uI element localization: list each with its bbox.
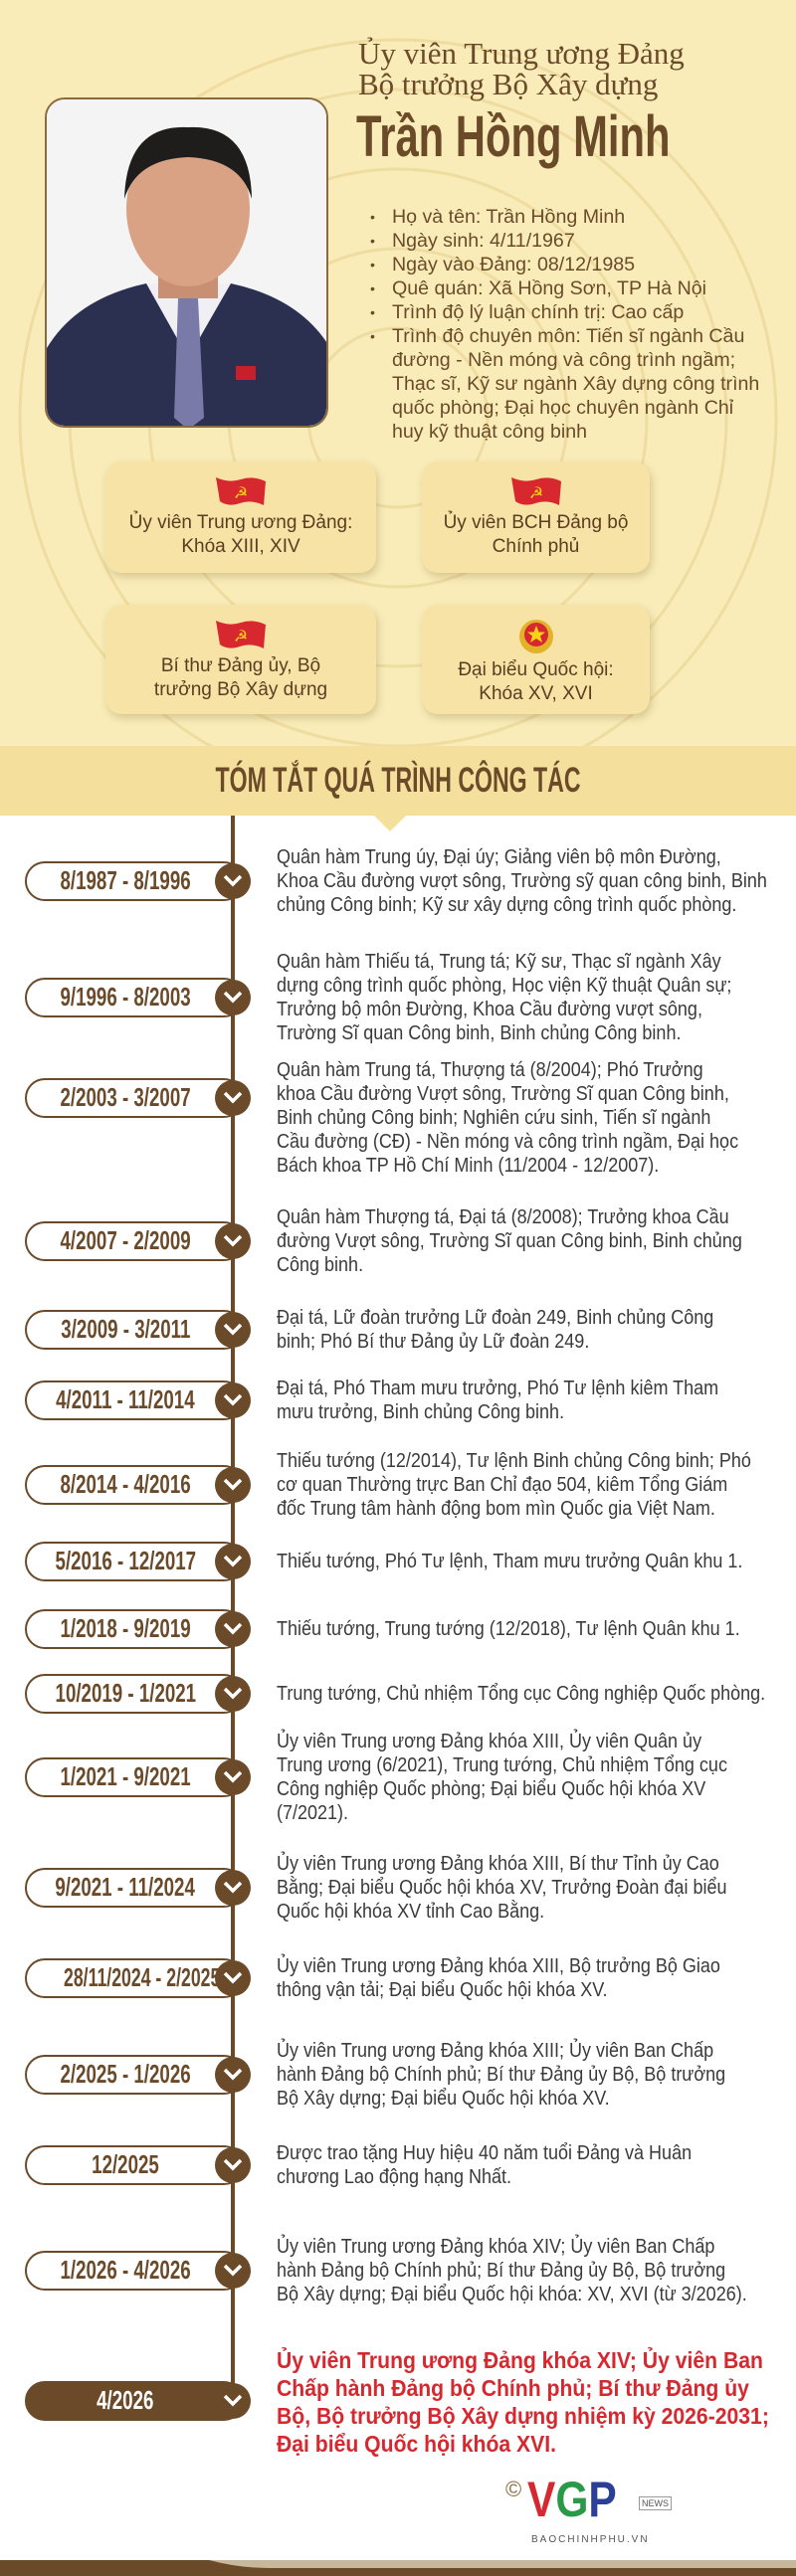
entry 5: binh; Phó Bí thư Đảng ủy Lữ đoàn 249. [277, 1331, 589, 1353]
entry 2: 9/1996 - 8/2003 [60, 982, 191, 1012]
entry 15: chương Lao động hạng Nhất. [277, 2166, 511, 2188]
entry 2: dựng công trình quốc phòng, Học viện Kỹ thuật Quân sự; [277, 975, 731, 997]
icon: party flag [511, 477, 561, 505]
entry 11: (7/2021). [277, 1802, 348, 1824]
entry 7 [25, 1450, 751, 1520]
card: central committee: Ủy viên Trung ương Đảng: [129, 512, 352, 533]
card: government party committee: Chính phủ [493, 536, 579, 557]
bio bullet list: Trình độ lý luận chính trị: Cao cấp [392, 301, 684, 323]
entry 2: Trường Sĩ quan Công binh, Binh chủng Công binh. [277, 1022, 681, 1044]
entry 5 [25, 1307, 713, 1353]
bio bullet list: Ngày sinh: 4/11/1967 [392, 230, 575, 252]
entry 7: Thiếu tướng (12/2014), Tư lệnh Binh chủng Công binh; Phó [277, 1450, 751, 1472]
entry 4: Quân hàm Thượng tá, Đại tá (8/2008); Trưởng khoa Cầu [277, 1206, 729, 1228]
entry 13: 28/11/2024 - 2/2025 [64, 1962, 220, 1992]
card: government party committee [422, 461, 650, 573]
entry 1: 8/1987 - 8/1996 [60, 865, 191, 895]
entry 2: Trưởng bộ môn Đường, Khoa Cầu đường vượt sông, [277, 999, 702, 1020]
entry 17: current: 4/2026 [97, 2385, 154, 2415]
entry 4: 4/2007 - 2/2009 [60, 1225, 191, 1255]
entry 11: Trung ương (6/2021), Trung tướng, Chủ nhiệm Tổng cục [277, 1754, 727, 1776]
entry 17: current: Đại biểu Quốc hội khóa XVI. [277, 2431, 556, 2457]
timeline vertical line [231, 816, 235, 2402]
entry 11 [25, 1729, 727, 1824]
icon: national emblem [519, 620, 553, 653]
logo: VGP: NEWS [642, 2498, 669, 2508]
entry 17: current [25, 2347, 769, 2457]
entry 3: Binh chủng Công binh; Nghiên cứu sinh, Tiến sĩ ngành [277, 1107, 710, 1129]
title: position: Ủy viên Trung ương Đảng [358, 36, 685, 71]
entry 1: Khoa Cầu đường vượt sông, Trường sỹ quan công binh, Binh [277, 870, 767, 892]
bio bullet list: đường - Nền móng và công trình ngầm; [392, 349, 735, 371]
entry 17: current: Ủy viên Trung ương Đảng khóa XIV; Ủy viên Ban [277, 2347, 763, 2373]
entry 16: hành Đảng bộ Chính phủ; Bí thư Đảng ủy Bộ, Bộ trưởng [277, 2260, 725, 2282]
card: party secretary minister [105, 605, 376, 714]
entry 12: Bằng; Đại biểu Quốc hội khóa XV, Trưởng Đoàn đại biểu [277, 1877, 726, 1899]
band pointer [374, 816, 406, 831]
section heading band [0, 746, 796, 816]
entry 6: 4/2011 - 11/2014 [56, 1384, 195, 1414]
entry 8: Thiếu tướng, Phó Tư lệnh, Tham mưu trưởng Quân khu 1. [277, 1551, 742, 1572]
entry 14: 2/2025 - 1/2026 [60, 2059, 191, 2089]
entry 5: Đại tá, Lữ đoàn trưởng Lữ đoàn 249, Binh chủng Công [277, 1307, 713, 1329]
entry 10 [25, 1674, 765, 1714]
icon: party flag [216, 477, 266, 505]
entry 15: 12/2025 [92, 2149, 159, 2179]
entry 16 [25, 2234, 747, 2305]
entry 4: đường Vượt sông, Trường Sĩ quan Công binh, Binh chủng [277, 1230, 742, 1252]
entry 9 [25, 1609, 740, 1649]
entry 2: Quân hàm Thiếu tá, Trung tá; Kỹ sư, Thạc sĩ ngành Xây [277, 951, 721, 973]
entry 3 [25, 1059, 738, 1177]
entry 3: Quân hàm Trung tá, Thượng tá (8/2004); Phó Trưởng [277, 1059, 703, 1081]
entry 3: Cầu đường (CĐ) - Nền móng và công trình ngầm, Đại học [277, 1131, 738, 1153]
entry 10: Trung tướng, Chủ nhiệm Tổng cục Công nghiệp Quốc phòng. [277, 1683, 765, 1705]
card: party secretary minister: Bí thư Đảng ủy, Bộ [161, 655, 320, 676]
header background [0, 0, 796, 746]
footer bar [0, 2560, 796, 2576]
entry 4: Công binh. [277, 1254, 363, 1276]
entry 6: Đại tá, Phó Tham mưu trưởng, Phó Tư lệnh kiêm Tham [277, 1378, 718, 1399]
entry 16: Ủy viên Trung ương Đảng khóa XIV; Ủy viên Ban Chấp [277, 2236, 714, 2258]
entry 10: 10/2019 - 1/2021 [55, 1678, 196, 1708]
logo: VGP: © [505, 2477, 521, 2501]
bio bullet list: Trình độ chuyên môn: Tiến sĩ ngành Cầu [392, 325, 744, 347]
logo: VGP: BAOCHINHPHU.VN [531, 2534, 650, 2545]
entry 6: mưu trưởng, Binh chủng Công binh. [277, 1401, 564, 1423]
entry 17: current: Chấp hành Đảng bộ Chính phủ; Bí thư Đảng ủy [277, 2375, 749, 2401]
section heading band: TÓM TẮT QUÁ TRÌNH CÔNG TÁC [215, 761, 581, 800]
entry 7: 8/2014 - 4/2016 [60, 1469, 191, 1499]
entry 8 [25, 1542, 742, 1581]
entry 3: khoa Cầu đường Vượt sông, Trường Sĩ quan Công binh, [277, 1083, 729, 1105]
entry 14: Bộ Xây dựng; Đại biểu Quốc hội khóa XV. [277, 2088, 610, 2110]
entry 7: cơ quan Thường trực Ban Chỉ đạo 504, kiêm Tổng Giám [277, 1474, 727, 1496]
bio bullet list: Ngày vào Đảng: 08/12/1985 [392, 254, 635, 276]
name heading: Trần Hồng Minh [356, 104, 670, 169]
entry 3: Bách khoa TP Hồ Chí Minh (11/2004 - 12/2007). [277, 1155, 659, 1177]
title: ministry: Bộ trưởng Bộ Xây dựng [358, 67, 658, 101]
entry 11: Công nghiệp Quốc phòng; Đại biểu Quốc hội khóa XV [277, 1778, 705, 1800]
entry 17: current: Bộ, Bộ trưởng Bộ Xây dựng nhiệm kỳ 2026-2031; [277, 2403, 769, 2429]
entry 11: 1/2021 - 9/2021 [60, 1761, 191, 1791]
entry 3: 2/2003 - 3/2007 [60, 1082, 191, 1112]
icon: party flag: ☭ [234, 627, 248, 645]
entry 11: Ủy viên Trung ương Đảng khóa XIII, Ủy viên Quân ủy [277, 1731, 701, 1752]
entry 12: 9/2021 - 11/2024 [56, 1872, 195, 1902]
bio bullet list: Họ và tên: Trần Hồng Minh [392, 206, 625, 228]
entry 12: Ủy viên Trung ương Đảng khóa XIII, Bí thư Tỉnh ủy Cao [277, 1853, 719, 1875]
entry 2 [25, 951, 731, 1044]
card: central committee [105, 461, 376, 573]
logo: VGP [505, 2472, 672, 2545]
entry 7: đốc Trung tâm hành động bom mìn Quốc gia Việt Nam. [277, 1498, 715, 1520]
icon: party flag [216, 621, 266, 648]
card: national assembly: Khóa XV, XVI [479, 683, 593, 704]
portrait photo [45, 97, 328, 428]
entry 13: thông vận tải; Đại biểu Quốc hội khóa XV. [277, 1979, 608, 2001]
bio bullet list: quốc phòng; Đại học chuyên ngành Chỉ [392, 397, 733, 419]
card: government party committee: Ủy viên BCH Đảng bộ [444, 512, 628, 533]
entry 5: 3/2009 - 3/2011 [61, 1314, 190, 1344]
entry 12: Quốc hội khóa XV tỉnh Cao Bằng. [277, 1901, 544, 1923]
card: national assembly [422, 605, 650, 714]
icon: party flag: ☭ [234, 483, 248, 502]
card: party secretary minister: trưởng Bộ Xây dựng [154, 679, 327, 700]
entry 14: Ủy viên Trung ương Đảng khóa XIII; Ủy viên Ban Chấp [277, 2040, 713, 2062]
bio bullet list: Quê quán: Xã Hồng Sơn, TP Hà Nội [392, 277, 706, 299]
entry 9: 1/2018 - 9/2019 [60, 1613, 191, 1643]
logo: VGP: VGP [527, 2472, 617, 2527]
entry 12 [25, 1852, 726, 1923]
bio bullet list: huy kỹ thuật công binh [392, 421, 587, 443]
bio bullet list [370, 206, 759, 443]
entry 1 [25, 846, 767, 916]
entry 9: Thiếu tướng, Trung tướng (12/2018), Tư lệnh Quân khu 1. [277, 1618, 740, 1640]
entry 14 [25, 2039, 725, 2110]
entry 16: Bộ Xây dựng; Đại biểu Quốc hội khóa: XV, XVI (từ 3/2026). [277, 2284, 747, 2305]
entry 4 [25, 1206, 742, 1276]
entry 6 [25, 1378, 718, 1423]
entry 1: Quân hàm Trung úy, Đại úy; Giảng viên bộ môn Đường, [277, 846, 721, 868]
entry 15: Được trao tặng Huy hiệu 40 năm tuổi Đảng và Huân [277, 2142, 692, 2164]
entry 8: 5/2016 - 12/2017 [55, 1546, 196, 1575]
card: national assembly: Đại biểu Quốc hội: [458, 659, 614, 680]
entry 15 [25, 2142, 692, 2188]
entry 16: 1/2026 - 4/2026 [60, 2255, 191, 2285]
entry 14: hành Đảng bộ Chính phủ; Bí thư Đảng ủy Bộ, Bộ trưởng [277, 2064, 725, 2086]
entry 13: Ủy viên Trung ương Đảng khóa XIII, Bộ trưởng Bộ Giao [277, 1955, 720, 1977]
icon: party flag: ☭ [528, 483, 543, 502]
entry 1: chủng Công binh; Kỹ sư xây dựng công trình quốc phòng. [277, 894, 736, 916]
bio bullet list: Thạc sĩ, Kỹ sư ngành Xây dựng công trình [392, 373, 759, 395]
entry 13 [25, 1953, 720, 2001]
card: central committee: Khóa XIII, XIV [181, 536, 300, 557]
